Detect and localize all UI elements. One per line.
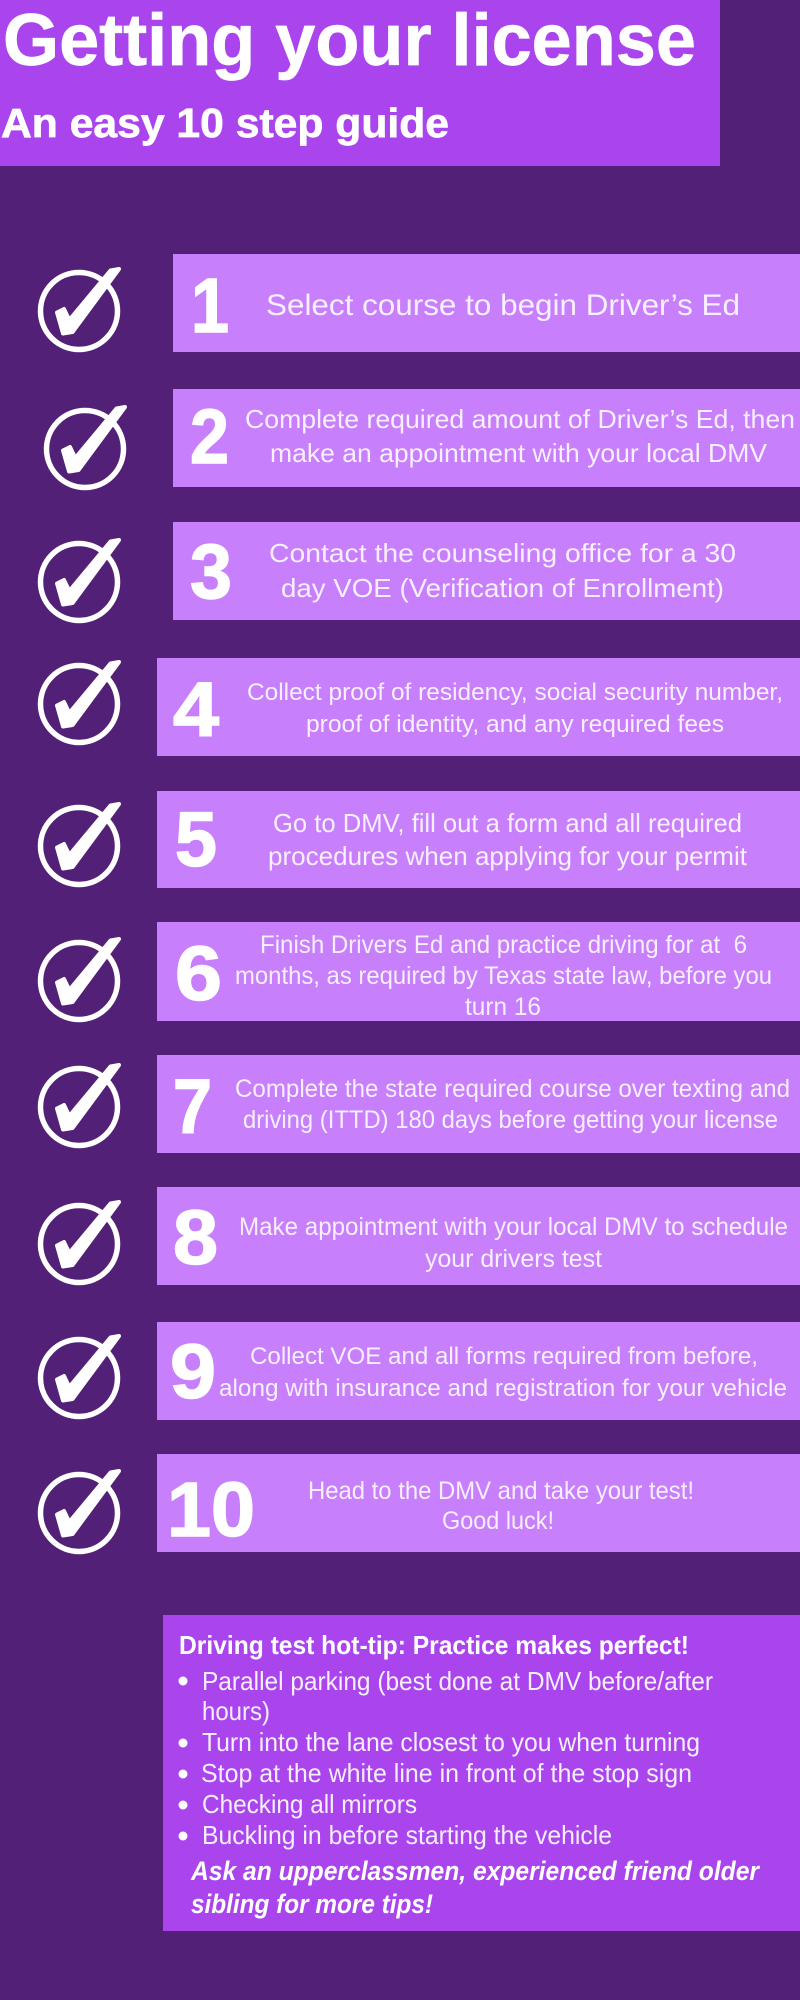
- panel: step 1 bar: [173, 254, 800, 352]
- icon: checkmark 3: [40, 540, 119, 620]
- step 8 text: your drivers test: [425, 1245, 602, 1273]
- number 6: 6: [175, 931, 222, 1017]
- tips list: hours): [202, 1696, 270, 1726]
- icon: checkmark 9: [40, 1336, 119, 1416]
- panel: step 9 bar: [157, 1322, 800, 1420]
- icon: checkmark 8: [40, 1202, 119, 1282]
- icon: checkmark 6: [40, 939, 119, 1020]
- step 6 text: Finish Drivers Ed and practice driving for at 6: [260, 931, 747, 959]
- tips list: Checking all mirrors: [202, 1789, 417, 1819]
- number 8: 8: [173, 1195, 218, 1281]
- closing advice: [190, 1856, 760, 1919]
- closing advice: Ask an upperclassmen, experienced friend older: [190, 1856, 760, 1886]
- step 9: [40, 1322, 800, 1420]
- header banner: [0, 0, 720, 166]
- step 7 text: [235, 1075, 790, 1134]
- step 4 text: Collect proof of residency, social security number,: [247, 679, 783, 706]
- step 6 text: months, as required by Texas state law, before you: [235, 962, 772, 990]
- step 9 text: [219, 1343, 787, 1402]
- step 1 text: Select course to begin Driver’s Ed: [266, 289, 740, 322]
- panel: step 2 bar: [173, 389, 800, 487]
- hot-tip heading: Driving test hot-tip: Practice makes perfect!: [179, 1630, 689, 1660]
- number 5: 5: [175, 797, 217, 883]
- step 2 text: make an appointment with your local DMV: [270, 438, 768, 468]
- step 9 text: Collect VOE and all forms required from before,: [250, 1343, 758, 1370]
- step 4 text: [247, 679, 783, 738]
- step 8: [40, 1187, 800, 1285]
- step 9 text: along with insurance and registration for your vehicle: [219, 1375, 787, 1402]
- panel: step 4 bar: [157, 658, 800, 756]
- tips list: [178, 1666, 713, 1850]
- panel: step 3 bar: [173, 522, 800, 620]
- icon: checkmark 5: [40, 804, 119, 884]
- panel: step 6 bar: [157, 922, 800, 1021]
- closing advice: sibling for more tips!: [191, 1889, 433, 1919]
- panel: step 5 bar: [157, 791, 800, 888]
- icon: checkmark 1: [40, 269, 119, 350]
- step 5 text: [268, 808, 748, 871]
- subtitle: An easy 10 step guide: [1, 100, 449, 146]
- icon: checkmark 10: [40, 1471, 119, 1552]
- tips list: Buckling in before starting the vehicle: [202, 1820, 612, 1850]
- step 10 text: Head to the DMV and take your test!: [308, 1477, 694, 1505]
- step 7 text: driving (ITTD) 180 days before getting your license: [243, 1106, 778, 1134]
- step 7: [40, 1055, 800, 1153]
- number 2: 2: [190, 394, 229, 480]
- step 6 text: [235, 931, 772, 1021]
- panel: step 8 bar: [157, 1187, 800, 1285]
- step 8 text: [239, 1213, 788, 1273]
- tips list: Parallel parking (best done at DMV before/after: [202, 1666, 713, 1696]
- icon: checkmark 7: [40, 1065, 119, 1146]
- title: Getting your license: [3, 0, 696, 81]
- step 8 text: Make appointment with your local DMV to schedule: [239, 1213, 788, 1241]
- icon: checkmark 2: [46, 407, 125, 488]
- step 3 text: Contact the counseling office for a 30: [269, 538, 736, 568]
- step 2 text: [245, 404, 795, 468]
- number 7: 7: [173, 1064, 212, 1150]
- step 3 text: [269, 538, 736, 603]
- step 6: [40, 922, 800, 1021]
- icon: checkmark 4: [40, 662, 119, 742]
- panel: driving test hot-tip: [163, 1615, 800, 1931]
- step 4: [40, 658, 800, 756]
- number 10: 10: [167, 1467, 255, 1553]
- tips list: Stop at the white line in front of the stop sign: [201, 1758, 692, 1788]
- step 5 text: Go to DMV, fill out a form and all required: [273, 808, 742, 838]
- step 10: [40, 1454, 800, 1553]
- step 1: [40, 254, 800, 352]
- panel: step 10 bar: [157, 1454, 800, 1552]
- step 6 text: turn 16: [465, 993, 541, 1021]
- number 1: 1: [191, 263, 229, 349]
- panel: step 7 bar: [157, 1055, 800, 1153]
- step 3 text: day VOE (Verification of Enrollment): [281, 573, 724, 603]
- step 2 text: Complete required amount of Driver’s Ed, then: [245, 404, 795, 434]
- step 4 text: proof of identity, and any required fees: [306, 711, 724, 738]
- number 4: 4: [173, 667, 219, 753]
- step 10 text: Good luck!: [442, 1507, 554, 1535]
- step 5 text: procedures when applying for your permit: [268, 841, 748, 871]
- tips list: Turn into the lane closest to you when turning: [202, 1727, 700, 1757]
- number 9: 9: [170, 1329, 216, 1415]
- step 10 text: [308, 1477, 694, 1535]
- step 5: [40, 791, 800, 888]
- step 3: [40, 522, 800, 620]
- step 7 text: Complete the state required course over texting and: [235, 1075, 790, 1103]
- number 3: 3: [190, 529, 232, 615]
- step 2: [46, 389, 800, 488]
